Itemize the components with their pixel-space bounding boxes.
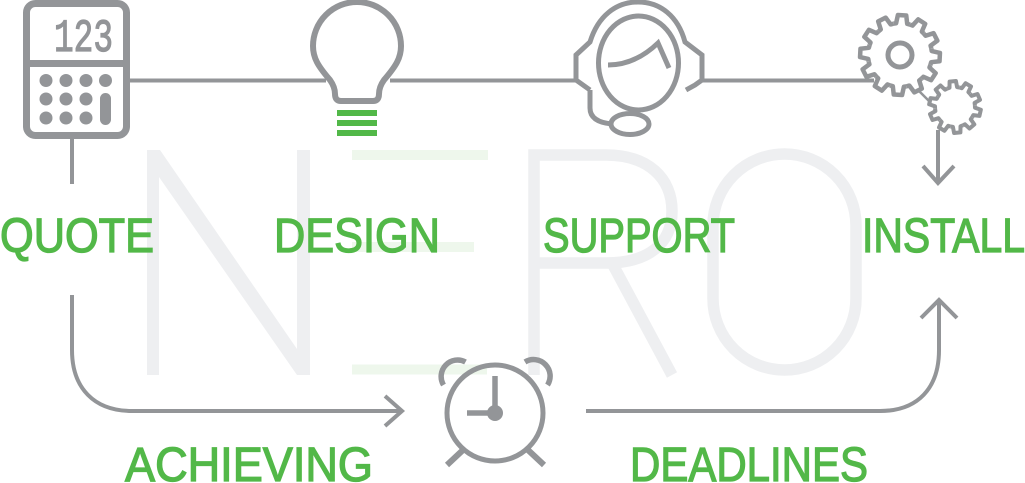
label: QUOTE: QUOTE xyxy=(0,210,154,263)
icon: light bulb xyxy=(313,2,401,133)
arrow: quote to clock xyxy=(72,295,402,426)
top connector: bulb to headset xyxy=(390,78,576,82)
label: DESIGN: DESIGN xyxy=(274,210,440,263)
watermark letter R xyxy=(534,155,672,375)
top connector: calculator to bulb xyxy=(129,78,326,82)
top connector: headset to gears xyxy=(702,78,874,82)
bulb base bars xyxy=(337,113,377,133)
arrow: clock to install xyxy=(586,300,957,411)
watermark letter O xyxy=(713,154,856,370)
watermark letter E xyxy=(352,155,488,370)
arrow: gears to install xyxy=(923,130,954,183)
watermark letter N xyxy=(147,150,310,375)
large gear xyxy=(858,13,942,97)
connector lines xyxy=(72,80,957,426)
watermark: NERO xyxy=(147,150,856,375)
label: SUPPORT: SUPPORT xyxy=(543,210,735,263)
connector: calculator down to quote xyxy=(70,138,74,184)
small gear xyxy=(926,79,984,135)
icon: gears xyxy=(858,13,984,135)
calculator keys xyxy=(40,74,112,125)
calculator display digits: 123 xyxy=(54,13,113,65)
icon: alarm clock xyxy=(441,360,550,465)
icon: support headset xyxy=(576,2,702,134)
icon: calculator xyxy=(26,4,127,136)
